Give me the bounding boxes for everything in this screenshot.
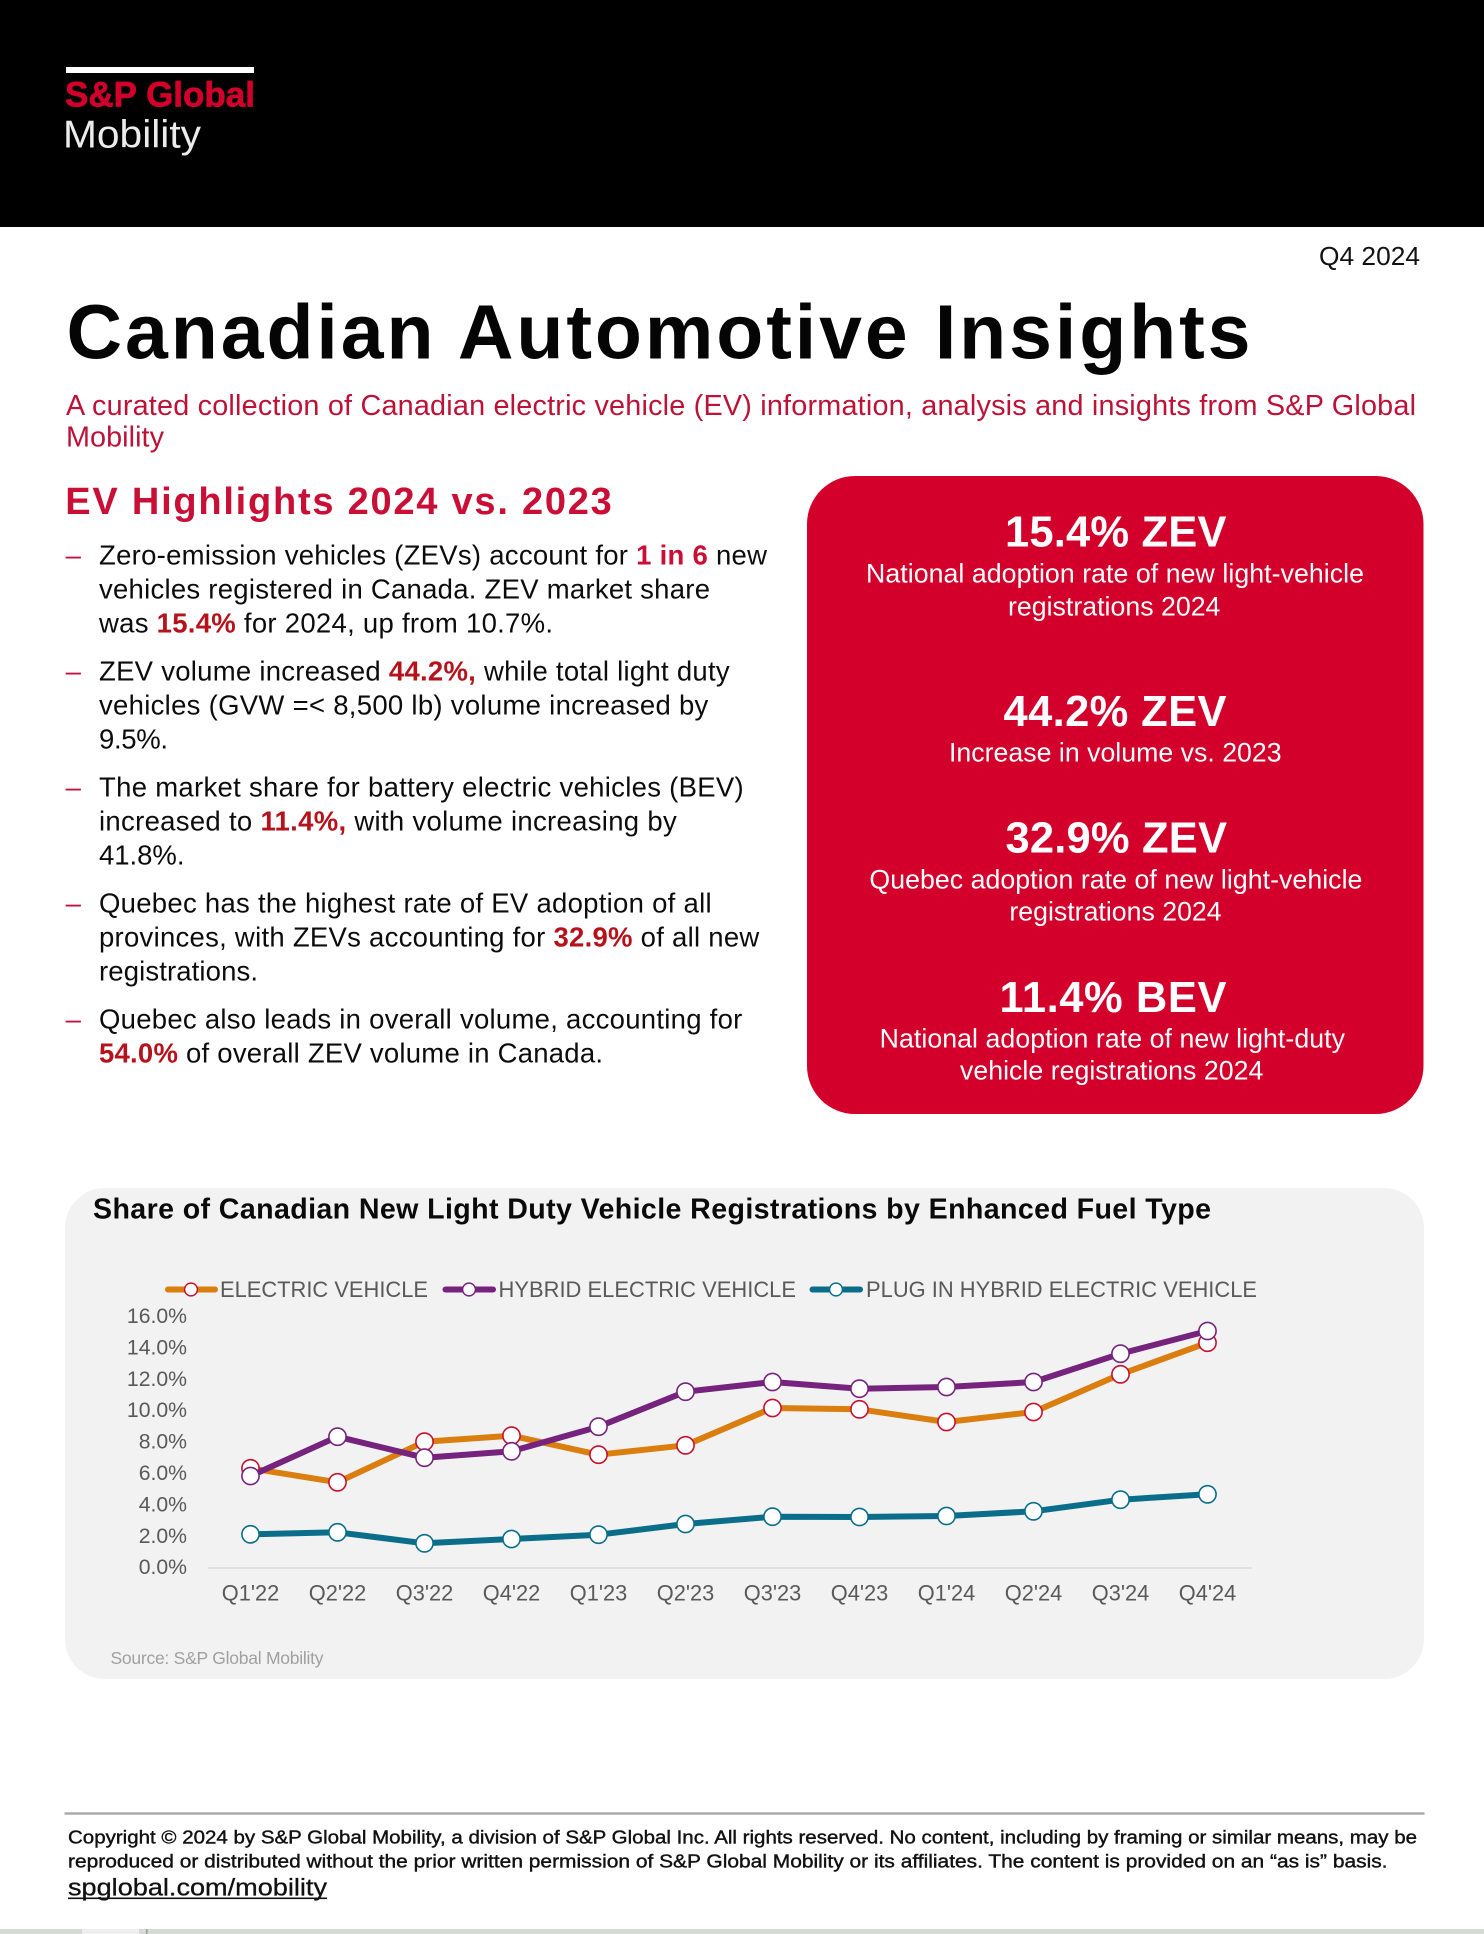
- legend: hybrid electric vehicle: HYBRID ELECTRIC VEHICLE: [498, 1277, 796, 1302]
- legend: [168, 1277, 1257, 1302]
- legend: plug in hybrid electric vehicle: PLUG IN HYBRID ELECTRIC VEHICLE: [866, 1277, 1257, 1302]
- bullet 1: was 15.4% for 2024, up from 10.7%.: [98, 608, 553, 639]
- bullet 1: [66, 540, 767, 639]
- logo: S&P Global Mobility: S&P Global: [65, 76, 255, 115]
- bullet 2: 9.5%.: [99, 724, 168, 755]
- panel: key statistics: [807, 476, 1424, 1114]
- bullet 4: –: [66, 888, 82, 919]
- y axis labels: 6.0%: [139, 1462, 187, 1485]
- copyright text: reproduced or distributed without the prior written permission of S&P Global Mobility or its affiliates. The content is provided on an “as is” basis.: [68, 1851, 1388, 1872]
- bullet 5: [66, 1004, 742, 1069]
- stat: 44.2% ZEV: 44.2% ZEV: [1004, 688, 1226, 736]
- stat: 15.4% ZEV: 15.4% ZEV: [1005, 509, 1226, 557]
- logo: S&P Global Mobility: [63, 67, 255, 157]
- bullet 3: The market share for battery electric vehicles (BEV): [99, 772, 744, 803]
- stat: 15.4% ZEV: [866, 509, 1364, 622]
- stat: 11.4% BEV: vehicle registrations 2024: [960, 1055, 1263, 1085]
- stat: 15.4% ZEV: registrations 2024: [1008, 592, 1221, 622]
- x axis labels: Q4'24: [1179, 1581, 1236, 1606]
- y axis labels: 16.0%: [127, 1305, 187, 1328]
- x axis labels: Q3'24: [1092, 1581, 1149, 1606]
- bullet 5: –: [66, 1004, 82, 1035]
- stat: 15.4% ZEV: National adoption rate of new light-vehicle: [866, 559, 1364, 589]
- bullet 4: provinces, with ZEVs accounting for 32.9% of all new: [99, 922, 759, 953]
- panel: chart: [65, 1188, 1424, 1679]
- bullet 1: vehicles registered in Canada. ZEV market share: [99, 574, 710, 605]
- y axis labels: 10.0%: [127, 1399, 187, 1422]
- bullet 4: registrations.: [99, 955, 258, 986]
- copyright text: [68, 1826, 1417, 1872]
- stat: 11.4% BEV: [880, 974, 1346, 1085]
- stat: 11.4% BEV: 11.4% BEV: [1000, 974, 1226, 1022]
- y axis labels: 14.0%: [127, 1336, 187, 1359]
- logo: S&P Global Mobility: Mobility: [63, 114, 202, 157]
- y axis labels: 8.0%: [139, 1431, 187, 1454]
- x axis labels: Q4'22: [483, 1581, 540, 1606]
- header band: [0, 0, 1484, 227]
- x axis labels: [222, 1581, 1236, 1606]
- heading: EV highlights: EV Highlights 2024 vs. 2023: [65, 481, 612, 523]
- series: plug in hybrid electric vehicle: [242, 1486, 1216, 1552]
- website link: spglobal.com/mobility: [68, 1874, 328, 1901]
- stat: 32.9% ZEV: [869, 815, 1362, 927]
- x axis labels: Q2'23: [657, 1581, 714, 1606]
- chart title: Share of Canadian New Light Duty Vehicle Registrations by Enhanced Fuel Type: [93, 1193, 1211, 1225]
- subtitle: [66, 390, 1416, 454]
- stat: 32.9% ZEV: Quebec adoption rate of new light-vehicle: [869, 864, 1362, 894]
- subtitle: A curated collection of Canadian electric vehicle (EV) information, analysis and insights from S&P Global: [66, 390, 1416, 422]
- x axis labels: Q1'23: [570, 1581, 627, 1606]
- stat: 44.2% ZEV: [949, 688, 1282, 768]
- footer: [64, 1812, 1424, 1901]
- bullet 1: Zero-emission vehicles (ZEVs) account for 1 in 6 new: [99, 540, 767, 571]
- x axis labels: Q1'24: [918, 1581, 975, 1606]
- x axis labels: Q3'23: [744, 1581, 801, 1606]
- copyright text: Copyright © 2024 by S&P Global Mobility, a division of S&P Global Inc. All rights reserved. No content, including by framing or similar means, may be: [68, 1826, 1417, 1847]
- y axis labels: 0.0%: [139, 1556, 187, 1579]
- bullet 2: vehicles (GVW =< 8,500 lb) volume increased by: [99, 690, 709, 721]
- x axis labels: Q4'23: [831, 1581, 888, 1606]
- panel: EV highlights: [65, 481, 767, 1069]
- bullet 3: –: [66, 772, 82, 803]
- bullet 2: ZEV volume increased 44.2%, while total light duty: [99, 656, 730, 687]
- bullet 4: Quebec has the highest rate of EV adoption of all: [99, 888, 712, 919]
- stat: 32.9% ZEV: 32.9% ZEV: [1006, 815, 1227, 863]
- line chart series: [242, 1322, 1216, 1552]
- date label: Q4 2024: [1319, 241, 1420, 271]
- subtitle: Mobility: [66, 422, 165, 454]
- bullet 5: Quebec also leads in overall volume, accounting for: [99, 1004, 742, 1035]
- series: electric vehicle: [242, 1334, 1216, 1491]
- y axis labels: [127, 1305, 187, 1579]
- bullet 2: [66, 656, 730, 755]
- bullet 4: [66, 888, 759, 986]
- title: Canadian Automotive Insights: [66, 289, 1250, 375]
- x axis labels: Q2'24: [1005, 1581, 1062, 1606]
- y axis labels: 2.0%: [139, 1525, 187, 1548]
- stat: 44.2% ZEV: Increase in volume vs. 2023: [949, 738, 1282, 768]
- bullet 3: [66, 772, 744, 870]
- y axis labels: 4.0%: [139, 1493, 187, 1516]
- source note: Source: S&P Global Mobility: [110, 1648, 324, 1668]
- bullet 3: increased to 11.4%, with volume increasing by: [99, 806, 677, 837]
- x axis labels: Q1'22: [222, 1581, 279, 1606]
- bullet 2: –: [66, 656, 82, 687]
- bullet 1: –: [66, 540, 82, 571]
- y axis labels: 12.0%: [127, 1368, 187, 1391]
- bullet 3: 41.8%.: [99, 839, 184, 870]
- x axis labels: Q3'22: [396, 1581, 453, 1606]
- x axis labels: Q2'22: [309, 1581, 366, 1606]
- bullet 5: 54.0% of overall ZEV volume in Canada.: [99, 1038, 603, 1069]
- series: hybrid electric vehicle: [242, 1322, 1216, 1485]
- stat: 32.9% ZEV: registrations 2024: [1009, 897, 1222, 927]
- legend: electric vehicle: ELECTRIC VEHICLE: [220, 1277, 428, 1302]
- stat: 11.4% BEV: National adoption rate of new light-duty: [880, 1023, 1346, 1053]
